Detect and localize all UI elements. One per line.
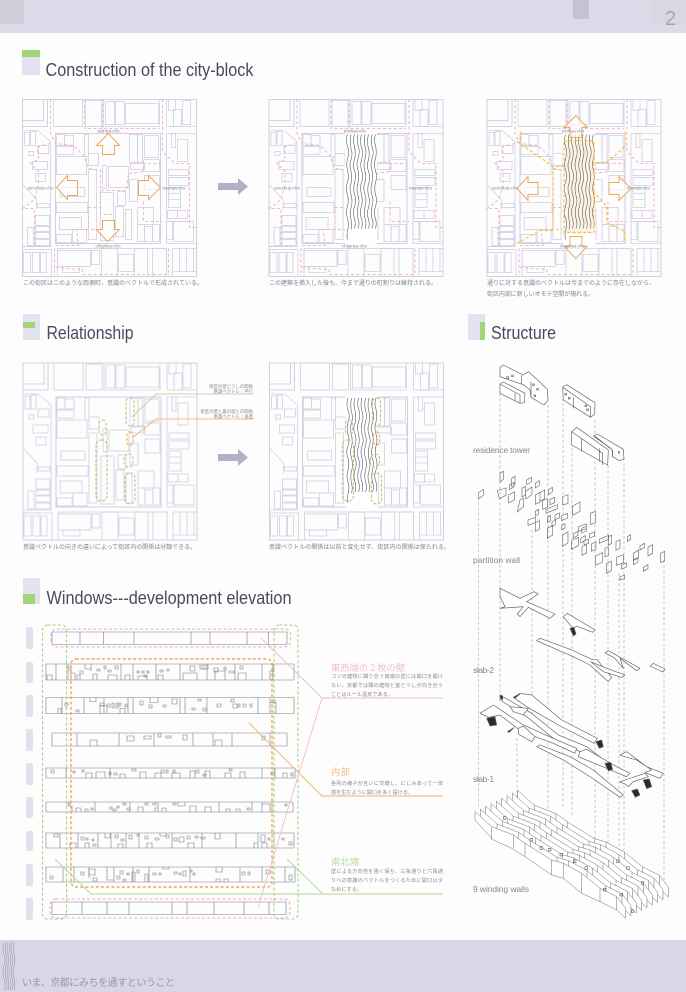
heading: Windows---development elevation: Windows---development elevation bbox=[46, 588, 292, 608]
text block: east-west walls: ない。京都では隣の建物と室どうしが向き合う bbox=[331, 682, 443, 689]
label: slab-2: slab-2 bbox=[473, 665, 494, 675]
elevation row 9 bbox=[52, 902, 286, 914]
top header band bbox=[0, 0, 686, 33]
caption: map 2: この建築を挿入した後も、今まで通りの町割りは維持される。 bbox=[269, 279, 437, 287]
text block: north-south ends: なめにする。 bbox=[331, 886, 362, 893]
pink dashed: east-west walls bbox=[50, 629, 290, 918]
icon: winding walls mark bbox=[3, 942, 15, 990]
green dashed: north-south ends bbox=[42, 625, 298, 919]
caption: relationship 2: 意識ベクトルの関係は以前と変化せず、街区内の関係は保たれる。 bbox=[269, 543, 450, 551]
elevation row 2 bbox=[46, 664, 294, 680]
leader lines: relationship bbox=[132, 394, 253, 438]
top header band: 2 bbox=[665, 8, 676, 30]
callout: parallel relation: 意識ベクトル：平行 bbox=[213, 388, 254, 395]
axonometric: slab-1 bbox=[480, 693, 663, 797]
panel: relationship map after bbox=[270, 363, 444, 540]
side tabs bbox=[26, 627, 33, 920]
axonometric: residence towers bbox=[500, 365, 624, 465]
callout: perpendicular relation: 街区の壁と裏の壁との関係 bbox=[200, 408, 254, 415]
caption: map 3 second line: 街区内部に新しいオモテ空間が現れる。 bbox=[487, 290, 594, 298]
elevation row 6 bbox=[46, 802, 293, 812]
panel: city block with street vectors bbox=[22, 100, 196, 276]
text block: interior: 各列の様子が互いに交錯し、にじみあって一体 bbox=[331, 780, 443, 787]
icon: four orange arrows bbox=[56, 134, 160, 242]
heading: Structure: Structure bbox=[491, 323, 556, 343]
leader lines: windows bbox=[55, 638, 443, 907]
text block: east-west walls: ことはルール違反である。 bbox=[331, 691, 393, 698]
elevation row 3 bbox=[46, 698, 294, 714]
elevation row 5 bbox=[46, 768, 295, 778]
text block: north-south ends: 南北端 bbox=[331, 856, 359, 867]
text block: interior: 内部 bbox=[331, 766, 350, 777]
heading icon: windows bbox=[23, 578, 40, 604]
arrow: map 1 to map 2 bbox=[218, 178, 248, 195]
callout: perpendicular relation: 意識ベクトル：垂直 bbox=[213, 413, 254, 420]
callout: perpendicular relation bbox=[200, 408, 254, 420]
panel: relationship map before bbox=[23, 363, 197, 540]
elevation row 4 bbox=[52, 733, 287, 746]
caption: map 1: この街区はこのような両側町、意識のベクトルで形成されている。 bbox=[23, 279, 203, 287]
axonometric: partition walls bbox=[479, 471, 665, 580]
green and orange dashed ovals bbox=[96, 398, 135, 504]
heading: Construction of the city-block: Construction of the city-block bbox=[46, 60, 254, 80]
caption: map 3: 通りに対する意識のベクトルは今までのように存在しながら、 bbox=[487, 279, 655, 287]
heading icon: structure bbox=[468, 314, 485, 340]
text block: north-south ends: りへの意識のベクトルをつくるために開口は少 bbox=[331, 877, 443, 884]
label: partition wall: partition wall bbox=[473, 555, 520, 565]
elevation row 8 bbox=[46, 867, 295, 882]
caption: relationship 1: 意識ベクトルの向きの違いによって街区内の関係は分類できる。 bbox=[23, 543, 196, 551]
text block: interior: 感を生むように開口を多く設ける。 bbox=[331, 789, 413, 796]
callout: parallel relation: 街区の壁どうしの関係 bbox=[209, 383, 254, 390]
panel: map with new inner frontage bbox=[487, 100, 661, 276]
axonometric: slab-2 bbox=[500, 588, 665, 682]
label: slab-1: slab-1 bbox=[473, 774, 494, 784]
orange arrows bbox=[517, 116, 631, 258]
structure dashed guides bbox=[479, 393, 664, 880]
bottom footer band bbox=[0, 940, 686, 992]
heading icon: construction bbox=[22, 50, 40, 75]
dashed group overlays bbox=[42, 625, 298, 919]
heading icon: relationship bbox=[23, 314, 40, 340]
label: 9 winding walls: 9 winding walls bbox=[473, 884, 529, 894]
text block: east-west walls bbox=[331, 662, 443, 698]
panel: map with inserted building bbox=[269, 100, 443, 276]
footer title: いま、京都にみちを通すということ bbox=[22, 977, 175, 989]
callout: parallel relation bbox=[209, 383, 254, 395]
yellow dashed vectors bbox=[517, 132, 625, 244]
elevation row 7 bbox=[46, 833, 294, 848]
arrow: relationship map bbox=[218, 449, 248, 466]
chart: development elevations bbox=[46, 632, 295, 914]
label: residence tower: residence tower bbox=[473, 445, 530, 455]
text block: east-west walls: コソの建物に隣り合う両端の壁には開口を開け bbox=[331, 673, 443, 680]
orange dashed: interior bbox=[71, 659, 272, 887]
heading: Relationship: Relationship bbox=[46, 323, 134, 343]
text block: interior bbox=[331, 766, 443, 796]
axonometric: 9 winding walls bbox=[475, 790, 668, 918]
text block: north-south ends: 壁による方向性を強く保ち、三条通りと六角通 bbox=[331, 868, 443, 875]
text block: east-west walls: 東西端の２枚の壁 bbox=[331, 662, 405, 673]
elevation row 1 bbox=[52, 632, 287, 644]
text block: north-south ends bbox=[331, 856, 443, 893]
